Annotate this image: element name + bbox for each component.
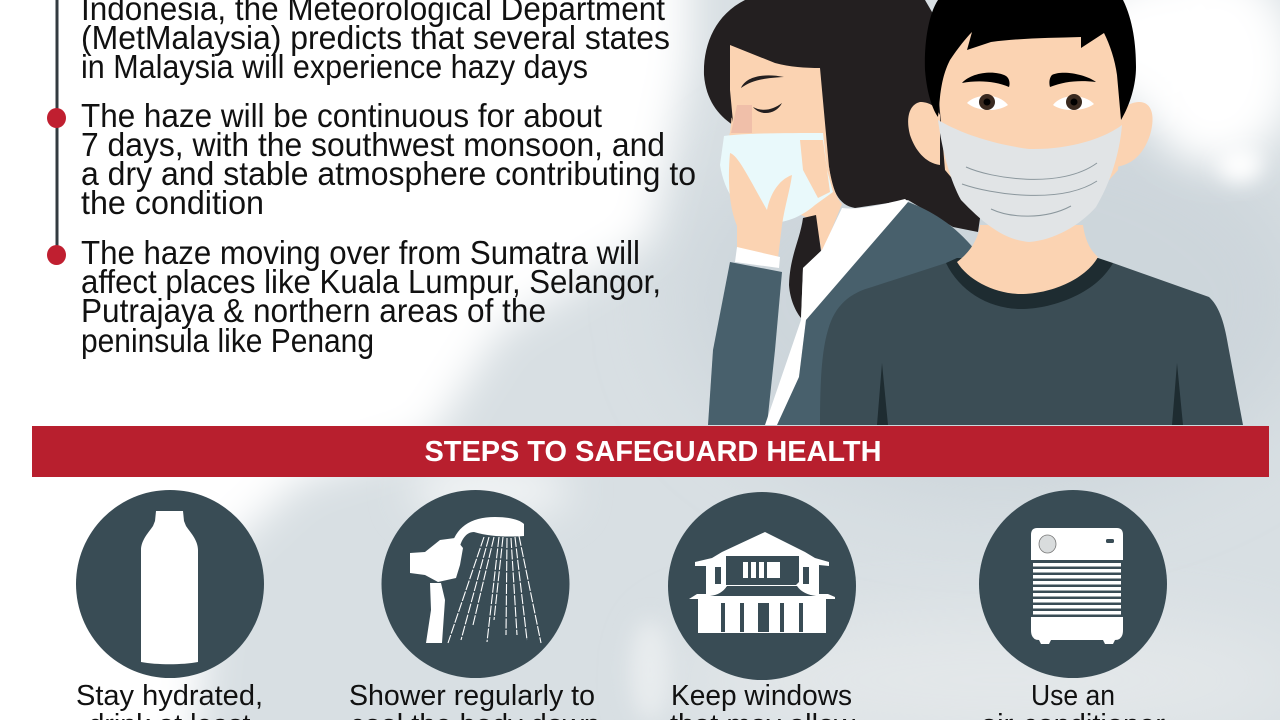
step: shower: Shower regularly to (349, 680, 595, 712)
bullet text: forecast: (MetMalaysia) predicts that several states (81, 19, 670, 56)
woman shirt (765, 199, 910, 425)
icon: air conditioner (979, 490, 1167, 678)
banner: steps to safeguard health (32, 426, 1269, 477)
bullet text: affected places (81, 234, 661, 359)
woman sleeve (708, 262, 782, 425)
man shirt (820, 263, 1243, 425)
bullet text: affected places: peninsula like Penang (81, 322, 374, 359)
step: windows (668, 492, 856, 720)
icon: shower head (382, 490, 570, 678)
step: hydration (76, 490, 264, 720)
man neck (957, 225, 1098, 294)
man hair (925, 0, 1136, 120)
bullet text: duration: The haze will be continuous for about (81, 97, 602, 134)
step: air conditioner (979, 490, 1167, 720)
illustration: man wearing mask (820, 0, 1243, 425)
step: hydration: Stay hydrated, (76, 680, 263, 712)
bullet text: forecast (81, 0, 670, 85)
man eyes (967, 96, 1094, 110)
man eyebrows (962, 73, 1096, 87)
woman hair (704, 0, 990, 232)
timeline line with bullets (47, 0, 66, 265)
man face (939, 20, 1122, 235)
bullet text: duration: the condition (81, 184, 264, 221)
bullet text: duration: 7 days, with the southwest monsoon, and (81, 126, 665, 163)
icon: water bottle (76, 490, 264, 678)
man collar (946, 258, 1113, 309)
step: windows: Keep windows (671, 680, 852, 712)
woman eye and brow (741, 75, 784, 113)
bullet text: duration: a dry and stable atmosphere contributing to (81, 155, 696, 192)
woman cuff (735, 247, 780, 268)
icon: house (668, 492, 856, 680)
man mask (938, 120, 1122, 242)
step: shower (349, 490, 600, 720)
woman hand (729, 153, 792, 258)
bullet text: affected places: Putrajaya & northern areas of the (81, 292, 546, 329)
woman mask (720, 133, 833, 223)
bullet text: affected places: affect places like Kuala Lumpur, Selangor, (81, 263, 661, 300)
woman jacket (777, 202, 975, 425)
man ears (908, 102, 940, 165)
bullet text: affected places: The haze moving over from Sumatra will (81, 234, 640, 271)
bullet text: duration (81, 97, 696, 221)
bullet text: forecast: in Malaysia will experience hazy days (81, 48, 588, 85)
woman face and neck (728, 45, 842, 253)
illustration: woman wearing mask (704, 0, 990, 425)
banner: steps to safeguard health: STEPS TO SAFEGUARD HEALTH (424, 436, 882, 468)
step: air conditioner: Use an (1031, 680, 1115, 712)
woman braid (789, 215, 821, 318)
